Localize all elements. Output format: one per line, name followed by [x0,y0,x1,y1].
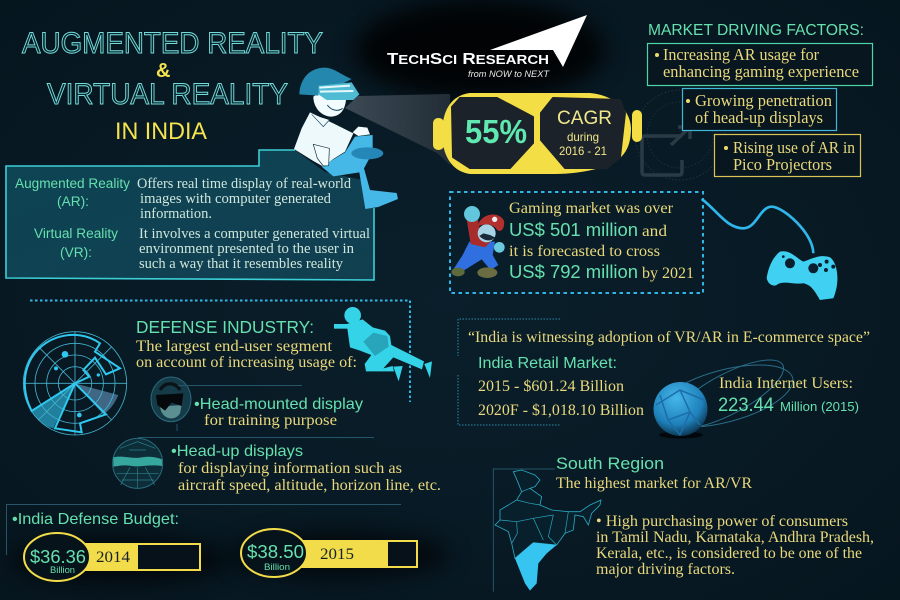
budget 2015 bar: 2015 [320,546,354,563]
panel: market driving factors [648,22,872,176]
factor box: pico projectors: Pico Projectors [733,155,832,174]
icon: head-mounted display portrait [151,377,191,422]
panel: gaming market [450,192,703,293]
logo [387,15,587,80]
ar description: Offers real time display of real-world [137,176,352,192]
panel: india defense budget [6,504,417,581]
defense heading: DEFENSE INDUSTRY: [136,317,314,337]
budget heading: •India Defense Budget: [12,511,179,528]
panel: defense industry [113,307,441,494]
vr label abbreviation: (VR): [60,245,92,260]
retail 2020 forecast value: 2020F - $1,018.10 Billion [478,402,644,419]
head-up heading: •Head-up displays [171,443,303,460]
cagr percentage: 55% [465,113,527,150]
south region description: in Tamil Nadu, Karnataka, Andhra Pradesh, [596,529,874,546]
factor box: pico projectors [714,134,860,176]
title line: in india: IN INDIA [115,118,207,145]
logo wordmark: TECH SCI RESEARCH [387,51,549,68]
south region heading: South Region [556,454,664,473]
icon: man wearing vr headset [294,68,398,209]
budget 2015 bar [241,529,417,577]
icon: globe with orbits [651,347,799,441]
cagr period: 2016 - 21 [559,144,607,158]
cagr during: during [567,130,599,144]
title line: augmented reality: AUGMENTED REALITY [22,27,323,60]
factor box: head-up displays [682,88,836,130]
panel: south region [556,454,874,578]
ar label: Augmented Reality [15,176,130,191]
dotted divider frame [30,300,410,402]
vr description: It involves a computer generated virtual [139,226,370,242]
gaming text line 1: Gaming market was over [509,200,674,217]
head-up description: aircraft speed, altitude, horizon line, etc. [178,477,441,494]
vr description: such a way that it resembles reality [139,256,344,272]
icon: mario character [451,206,505,278]
factor box: gaming [648,44,872,86]
factor box: gaming: enhancing gaming experience [663,62,859,81]
internet users heading: India Internet Users: [719,375,853,392]
title [22,27,323,145]
ar description: information. [140,206,212,222]
goggle left strap [433,118,444,150]
gaming text and: and [642,223,667,240]
head-up description: for displaying information such as [178,460,402,477]
panel: e-commerce and retail [458,319,870,425]
logo tagline: from NOW to NEXT [468,69,550,80]
internet users value: 223.44 [718,395,774,416]
icon: radar [23,332,127,435]
gaming text line 3: it is forecasted to cross [509,243,660,260]
head-mounted display connector line [177,386,302,431]
icon: head-up display view [113,438,163,488]
factor box: pico projectors: Rising use of AR in [733,138,855,157]
vr beam [345,94,450,165]
ar label abbreviation: (AR): [57,194,89,209]
goggle frame [442,93,631,174]
south region description: major driving factors. [596,561,735,578]
south region description: Kerala, etc., is considered to be one of the [596,545,862,562]
gaming value 2021: US$ 792 million [509,262,638,282]
head-mounted heading: •Head-mounted display [194,396,363,413]
market heading: MARKET DRIVING FACTORS: [648,22,864,39]
retail 2015 value: 2015 - $601.24 Billion [478,378,624,395]
goggles: 55% cagr [433,93,642,174]
gaming text by 2021: by 2021 [642,265,694,282]
budget 2014 bar: Billion [50,565,75,575]
cagr label: CAGR [557,108,612,129]
goggle left lens [452,98,533,168]
icon: faint share symbol [635,90,725,180]
defense description: The largest end-user segment [136,338,333,355]
goggle right lens [541,98,625,168]
icon: india map [493,469,601,592]
factor box: head-up displays: of head-up displays [695,108,823,127]
title ampersand: & [156,60,170,82]
factor box: head-up displays: Growing penetration [695,91,832,110]
panel: internet users [718,375,859,416]
goggle right strap [632,110,642,142]
e-commerce quote: “India is witnessing adoption of VR/AR in E-commerce space” [468,329,870,346]
budget 2015 bar: Billion [264,562,290,572]
south region subheading: The highest market for AR/VR [556,475,752,492]
vr label: Virtual Reality [34,226,118,241]
south region description: • High purchasing power of consumers [596,513,848,530]
logo arrow [490,15,587,67]
head-up display connector line [138,436,374,438]
budget 2014 bar: $36.36 [30,547,86,567]
icon: soldier [334,307,432,381]
retail heading: India Retail Market: [478,355,617,372]
budget 2014 bar [24,533,200,581]
icon: game controller with cable [702,199,837,300]
ar description: images with computer generated [140,191,332,207]
factor box: gaming: Increasing AR usage for [663,45,819,64]
defense description: on account of increasing usage of: [136,354,357,371]
title line: virtual reality: VIRTUAL REALITY [47,78,288,111]
internet users unit: Million (2015) [780,400,859,414]
budget 2015 bar: $38.50 [247,542,304,562]
gaming value 2016: US$ 501 million [509,220,638,240]
head-mounted description: for training purpose [204,412,337,429]
panel: definitions [6,150,374,280]
budget 2014 bar: 2014 [96,549,130,566]
vr description: environment presented to the user in [139,241,355,257]
